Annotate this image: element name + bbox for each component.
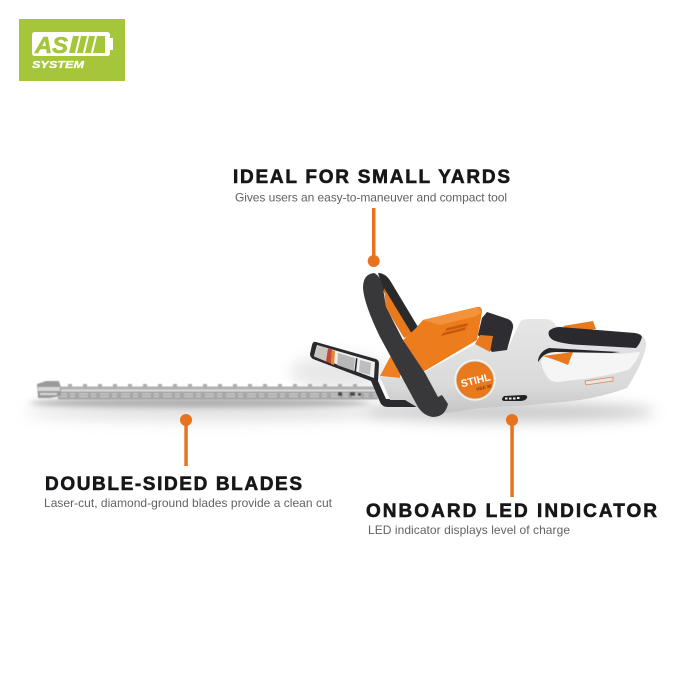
STIHL badge: HSA 30 [476,383,493,392]
trimmer body group [363,273,646,417]
battery [475,312,513,352]
orange rear handle accent [563,321,596,332]
badge: AS system battery logo [19,19,125,81]
handle opening [541,352,640,382]
rear handle grip [548,327,642,348]
heading: ideal for small yards: IDEAL FOR SMALL YARDS [233,167,510,188]
ground shadow [25,354,655,422]
heading: onboard LED indicator: ONBOARD LED INDICATOR [366,501,657,522]
connector: top pointer [368,208,380,267]
STIHL badge [455,360,495,400]
text: ideal for small yards description: Gives users an easy-to-maneuver and compact tool [235,190,507,204]
badge: AS system battery logo: AS [34,32,69,58]
text: onboard LED indicator description: LED indicator displays level of charge [368,523,570,537]
connector: right pointer [506,414,518,497]
badge: AS system battery logo: SYSTEM [32,59,84,71]
trigger [538,348,620,365]
guard back edge [378,273,418,338]
grey main body [380,319,646,414]
heading: double-sided blades: DOUBLE-SIDED BLADES [45,474,302,495]
orange motor housing [380,307,482,378]
instruction panel bracket [310,342,417,407]
connector: left pointer [180,414,192,466]
LED indicator [502,395,527,401]
STIHL badge: STIHL [460,371,492,390]
blade [37,381,378,400]
warning label [585,377,613,385]
front guard handle [363,273,448,417]
text: double-sided blades description: Laser-cut, diamond-ground blades provide a clean cut [44,496,333,510]
orange inner guard panel [384,288,412,338]
illustration: hedge trimmer [25,273,655,422]
